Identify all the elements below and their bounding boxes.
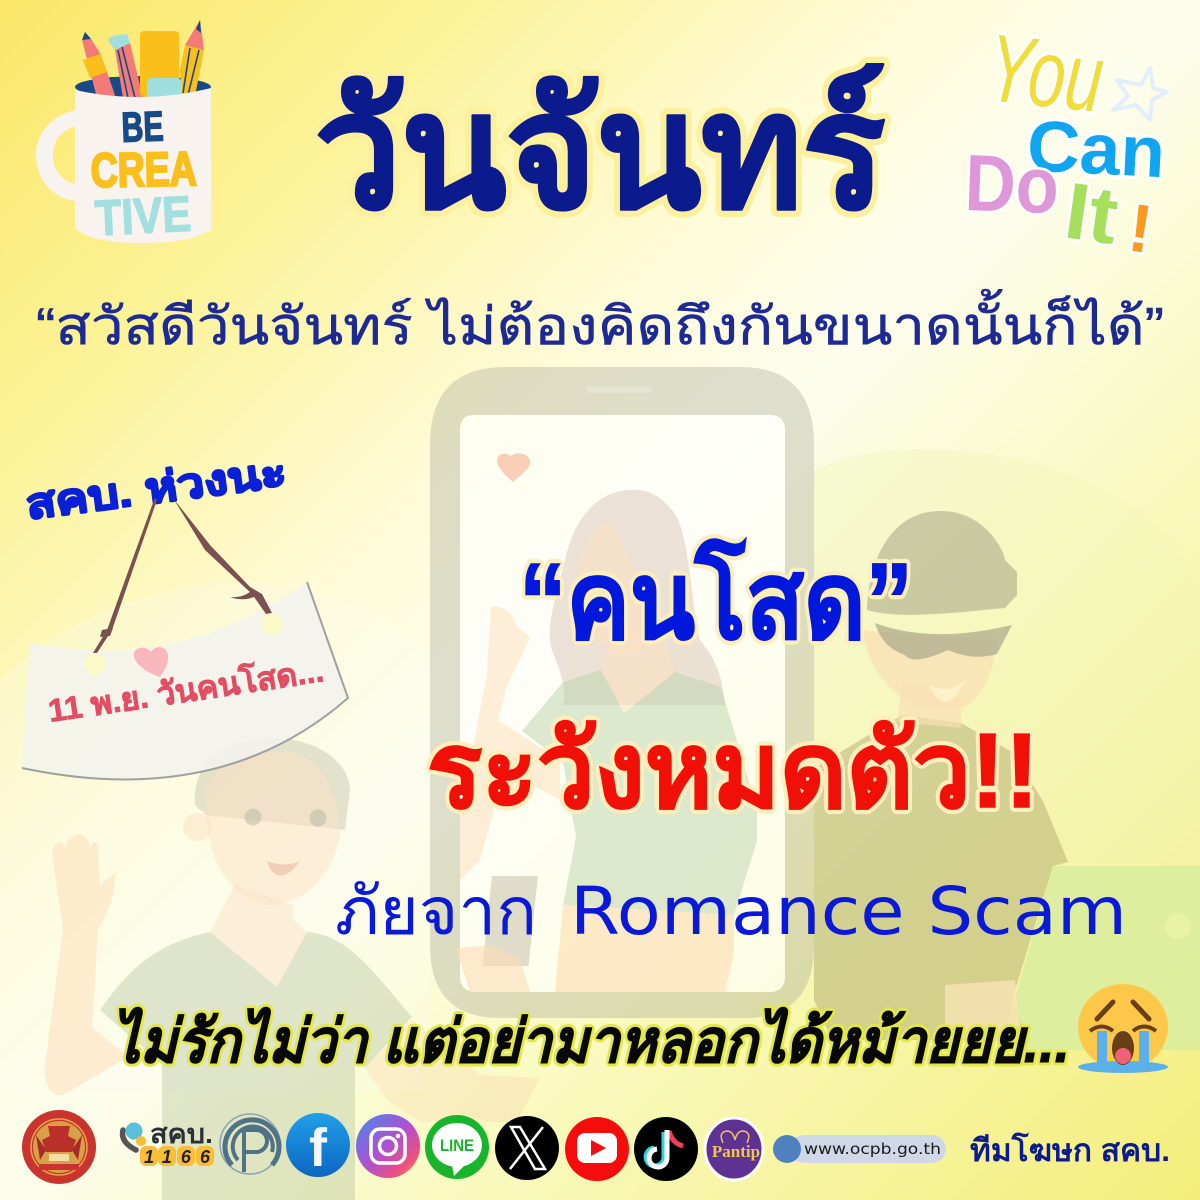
mug body bbox=[75, 88, 211, 243]
subheading: romance scam: Romance Scam bbox=[570, 873, 1127, 950]
icon: crying emoji bbox=[1078, 984, 1168, 1073]
tagline: ไม่รักไม่ว่า แต่อย่ามาหลอกได้หม้ายยย... bbox=[112, 1007, 1070, 1075]
background illustration: romance scam scene bbox=[0, 367, 1200, 1200]
ropes bbox=[93, 498, 157, 653]
title: วันจันทร์ bbox=[315, 62, 885, 241]
you can do it lettering bbox=[963, 14, 1167, 268]
logo row bbox=[22, 1110, 1170, 1184]
pencils bbox=[82, 20, 204, 100]
heading: beware: ระวังหมดตัว!! bbox=[427, 712, 1039, 830]
icon: youtube bbox=[565, 1117, 629, 1181]
logo: ocpb emblem bbox=[220, 1114, 280, 1174]
mug handle bbox=[36, 110, 76, 201]
icon: facebook bbox=[286, 1113, 350, 1178]
sign text: 11 พ.ย. วันคนโสด... bbox=[46, 651, 326, 729]
icon: facebook: f bbox=[309, 1118, 328, 1178]
logo: 1166 hotline: สคบ. bbox=[150, 1119, 213, 1149]
heading: single people: “คนโสด” bbox=[519, 538, 913, 661]
you can do it lettering: It bbox=[1060, 166, 1124, 261]
laptop bbox=[1000, 866, 1200, 1050]
sign heading: สคบ. ห่วงนะ bbox=[23, 448, 289, 528]
you can do it lettering: Can bbox=[1025, 106, 1167, 193]
logo: 1166 hotline bbox=[123, 1119, 214, 1167]
background blob left bbox=[0, 583, 430, 1090]
mug illustration: CREA bbox=[90, 143, 197, 198]
phone bbox=[430, 367, 814, 1018]
sign heart bbox=[134, 647, 168, 677]
mug illustration: TIVE bbox=[94, 186, 193, 246]
icon: instagram bbox=[356, 1114, 420, 1178]
tagline: ไม่รักไม่ว่า แต่อย่ามาหลอกได้หม้ายยย... bbox=[112, 1007, 1070, 1075]
mug lettering: BE bbox=[121, 102, 164, 151]
sign card bbox=[22, 582, 348, 779]
logo: ocpb seal bbox=[22, 1110, 96, 1184]
heading: beware: ระวังหมดตัว!! bbox=[427, 712, 1039, 830]
mug rim bbox=[75, 76, 211, 98]
hanging sign bbox=[22, 448, 348, 779]
icon: x bbox=[495, 1116, 559, 1180]
website badge: www.ocpb.go.th bbox=[804, 1140, 941, 1158]
icon: tiktok bbox=[634, 1117, 698, 1181]
logo: 1166 hotline: 1166 bbox=[144, 1147, 211, 1167]
you can do it lettering: You bbox=[983, 14, 1108, 133]
mug illustration bbox=[36, 20, 211, 246]
title: วันจันทร์ bbox=[315, 62, 885, 241]
woman bbox=[456, 490, 757, 992]
icon: line bbox=[425, 1115, 489, 1179]
heading: single people: “คนโสด” bbox=[519, 538, 913, 661]
team credit: ทีมโฆษก สคบ. bbox=[970, 1132, 1170, 1168]
icon: pantip bbox=[705, 1118, 763, 1180]
website badge bbox=[773, 1135, 946, 1163]
icon: line: LINE bbox=[440, 1136, 474, 1155]
man bbox=[45, 738, 540, 1200]
you can do it lettering: Do bbox=[963, 138, 1060, 230]
background blob right bbox=[813, 449, 1200, 1040]
subheading: romance scam: ภัยจาก bbox=[335, 873, 537, 950]
thief bbox=[814, 511, 1068, 1040]
heart in phone bbox=[497, 453, 530, 482]
thief hand bbox=[945, 980, 1020, 1050]
you can do it lettering: ! bbox=[1124, 190, 1157, 268]
icon: pantip: Pantip bbox=[712, 1142, 760, 1161]
quote subtitle: “สวัสดีวันจันทร์ ไม่ต้องคิดถึงกันขนาดนั้นก็ได้” bbox=[36, 289, 1164, 356]
subheading: romance scam bbox=[335, 873, 1127, 950]
